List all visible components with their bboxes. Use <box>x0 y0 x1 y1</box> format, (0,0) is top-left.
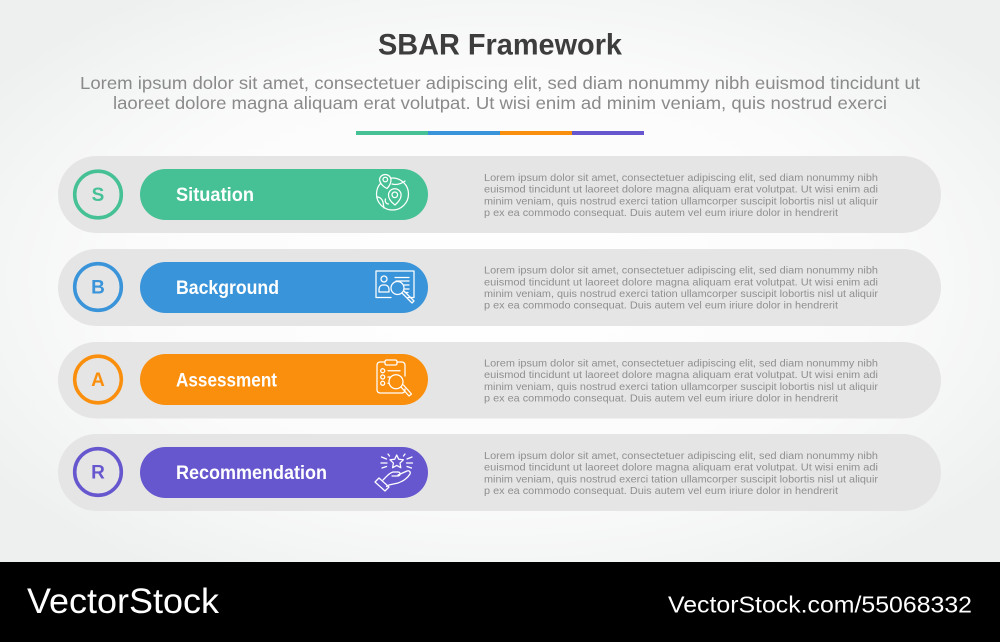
text block: assessment: p ex ea commodo consequat. Duis autem vel eum iriure dolor in hendrerit <box>484 393 838 404</box>
letter badge: S: S <box>92 185 104 206</box>
text block: assessment: euismod tincidunt ut laoreet dolore magna aliquam erat volutpat. Ut wisi enim adi <box>484 370 878 381</box>
text block: recommendation: euismod tincidunt ut laoreet dolore magna aliquam erat volutpat. Ut wisi enim adi <box>484 463 878 474</box>
subtitle text <box>80 73 920 113</box>
footer bar <box>0 562 1000 642</box>
icon: hand holding star <box>375 454 412 491</box>
pill: assessment <box>140 354 428 405</box>
icon: clipboard with magnifier <box>377 360 412 396</box>
text block: recommendation: Lorem ipsum dolor sit amet, consectetuer adipiscing elit, sed diam nonummy nibh <box>484 451 878 462</box>
panel: situation <box>58 156 941 233</box>
subtitle text: Lorem ipsum dolor sit amet, consectetuer adipiscing elit, sed diam nonummy nibh euismod tincidunt ut <box>80 73 920 93</box>
heading: assessment: Assessment <box>176 370 277 392</box>
pill: background <box>140 262 428 313</box>
heading: background: Background <box>176 277 279 299</box>
panel: background <box>58 249 941 326</box>
text block: recommendation: p ex ea commodo consequat. Duis autem vel eum iriure dolor in hendrerit <box>484 486 838 497</box>
letter badge: R <box>75 449 121 495</box>
heading: recommendation: Recommendation <box>176 462 327 484</box>
text block: assessment <box>484 358 879 404</box>
footer image id: VectorStock.com/55068332 <box>668 592 972 618</box>
panel: recommendation <box>58 434 941 511</box>
footer logo: VectorStock <box>27 582 220 621</box>
text block: recommendation: minim veniam, quis nostrud exerci tation ullamcorper suscipit lobortis nisl ut aliquir <box>484 474 879 485</box>
letter badge: B <box>75 264 121 310</box>
heading: situation: Situation <box>176 184 254 206</box>
icon: globe with map pins <box>376 174 408 210</box>
letter badge: B: B <box>91 278 105 298</box>
text block: situation: euismod tincidunt ut laoreet dolore magna aliquam erat volutpat. Ut wisi enim adi <box>484 185 878 196</box>
text block: background: p ex ea commodo consequat. Duis autem vel eum iriure dolor in hendrerit <box>484 301 838 312</box>
text block: situation <box>484 173 879 219</box>
letter badge: A: A <box>91 370 105 391</box>
text block: background: euismod tincidunt ut laoreet dolore magna aliquam erat volutpat. Ut wisi enim adi <box>484 277 878 288</box>
text block: assessment: Lorem ipsum dolor sit amet, consectetuer adipiscing elit, sed diam nonummy nibh <box>484 358 878 369</box>
subtitle text: laoreet dolore magna aliquam erat volutpat. Ut wisi enim ad minim veniam, quis nostrud exerci <box>113 93 887 113</box>
letter badge: R: R <box>91 462 105 484</box>
four-colour divider <box>356 131 644 135</box>
panel: assessment <box>58 342 941 418</box>
text block: situation: minim veniam, quis nostrud exerci tation ullamcorper suscipit lobortis nisl ut aliquir <box>484 196 879 207</box>
pill: situation <box>140 169 428 220</box>
text block: recommendation <box>484 451 879 497</box>
text block: background: minim veniam, quis nostrud exerci tation ullamcorper suscipit lobortis nisl ut aliquir <box>484 289 879 300</box>
pill: recommendation <box>140 447 428 498</box>
text block: situation: p ex ea commodo consequat. Duis autem vel eum iriure dolor in hendrerit <box>484 208 838 219</box>
title: SBAR Framework <box>378 28 622 62</box>
text block: situation: Lorem ipsum dolor sit amet, consectetuer adipiscing elit, sed diam nonummy nibh <box>484 173 878 184</box>
text block: assessment: minim veniam, quis nostrud exerci tation ullamcorper suscipit lobortis nisl ut aliquir <box>484 382 879 393</box>
letter badge: S <box>75 171 121 218</box>
icon: profile card with magnifier <box>376 271 414 303</box>
text block: background <box>484 266 879 312</box>
letter badge: A <box>75 356 121 403</box>
text block: background: Lorem ipsum dolor sit amet, consectetuer adipiscing elit, sed diam nonummy nibh <box>484 266 878 277</box>
